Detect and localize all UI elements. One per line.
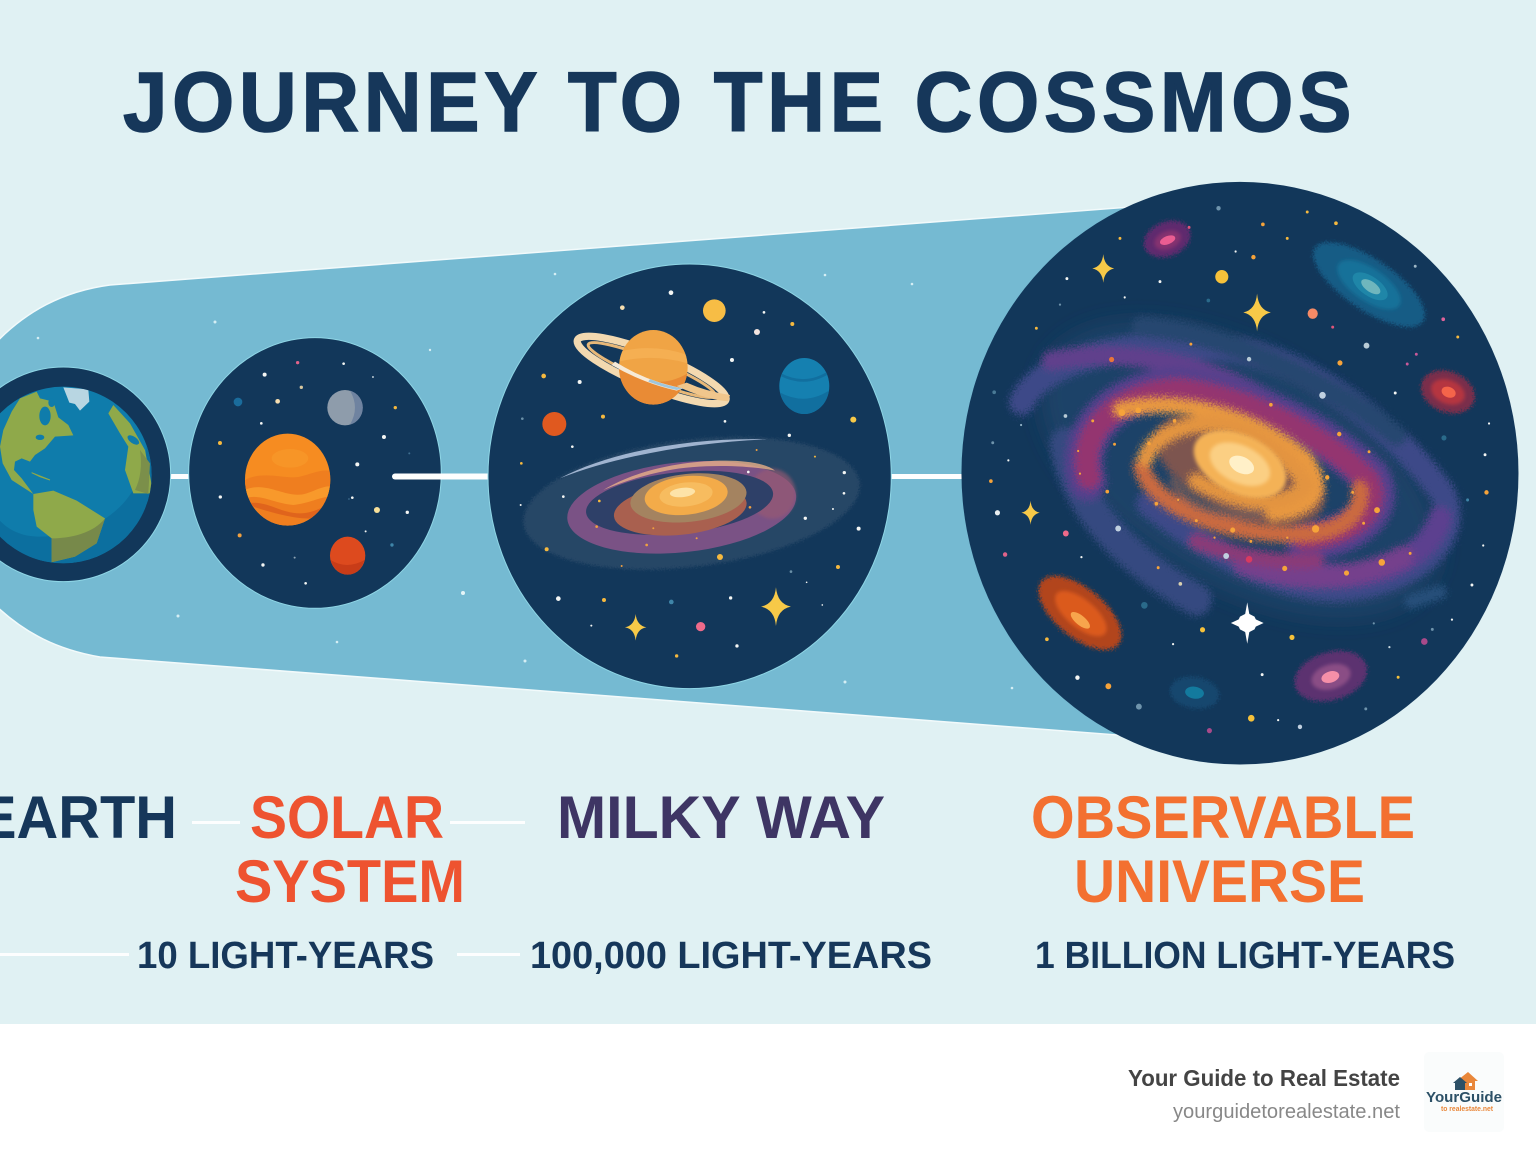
- polar ice: [63, 387, 89, 411]
- label: observable universe: [1031, 784, 1415, 915]
- small stars: [520, 290, 861, 658]
- galaxy: teal: [1301, 227, 1437, 343]
- footer url: yourguidetorealestate.net: [1173, 1101, 1400, 1123]
- planet: orange-red: [542, 412, 566, 436]
- galaxy: magenta: [1139, 214, 1196, 264]
- label connector lines: [0, 821, 525, 956]
- title: JOURNEY TO THE COSSMOS: [123, 56, 1351, 149]
- footer logo: to realestate.net: [1441, 1106, 1494, 1113]
- footer band: [0, 1024, 1536, 1154]
- galaxy disc: [516, 420, 867, 587]
- land: europe africa: [108, 405, 153, 493]
- footer logo: [1424, 1052, 1504, 1132]
- distance: 10 light-years: 10 LIGHT-YEARS: [137, 935, 434, 977]
- label: observable universe: UNIVERSE: [1074, 848, 1365, 915]
- planet: small blue: [234, 398, 242, 406]
- galaxy: small blue: [1168, 673, 1221, 712]
- footer logo: YourGuide: [1426, 1089, 1502, 1106]
- label: solar system: [235, 784, 465, 915]
- spiral galaxy: [994, 261, 1486, 679]
- galaxy streak: [560, 439, 767, 478]
- four-point stars: [761, 587, 791, 626]
- white star: [1231, 602, 1264, 644]
- stars: [218, 361, 410, 585]
- circle: milky way: [488, 264, 891, 689]
- circle: solar system: [189, 338, 441, 608]
- planet: grey moon: [327, 390, 363, 425]
- planet: yellow: [703, 299, 726, 322]
- expanding scale beam: [0, 207, 1130, 736]
- connector line: solar system to milky way: [392, 474, 492, 480]
- galaxy: pink: [1289, 643, 1373, 709]
- label: milky way: MILKY WAY: [557, 784, 885, 851]
- connector line: earth to observable universe: [165, 474, 966, 479]
- galaxy: red: [1415, 363, 1481, 421]
- distance: 100,000 light-years: 100,000 LIGHT-YEARS: [530, 935, 932, 977]
- planet: orange sun: [245, 434, 330, 526]
- label: observable universe: OBSERVABLE: [1031, 784, 1415, 851]
- galaxy: orange: [1027, 562, 1133, 664]
- small stars: [989, 206, 1490, 733]
- distance: 1 billion light-years: 1 BILLION LIGHT-YEARS: [1035, 935, 1455, 977]
- planet: red: [330, 537, 365, 575]
- land: north america: [0, 392, 73, 494]
- planet: saturn: [574, 330, 730, 408]
- land: south america: [33, 491, 105, 562]
- spiral sparkle: [1077, 343, 1412, 576]
- circle: earth: [0, 367, 171, 582]
- planet: blue: [779, 358, 829, 414]
- circle: observable universe: [961, 182, 1518, 765]
- footer brand name: Your Guide to Real Estate: [1128, 1065, 1400, 1091]
- label: solar system: SYSTEM: [235, 848, 465, 915]
- four-point stars: [1092, 254, 1114, 283]
- label: solar system: SOLAR: [250, 784, 444, 851]
